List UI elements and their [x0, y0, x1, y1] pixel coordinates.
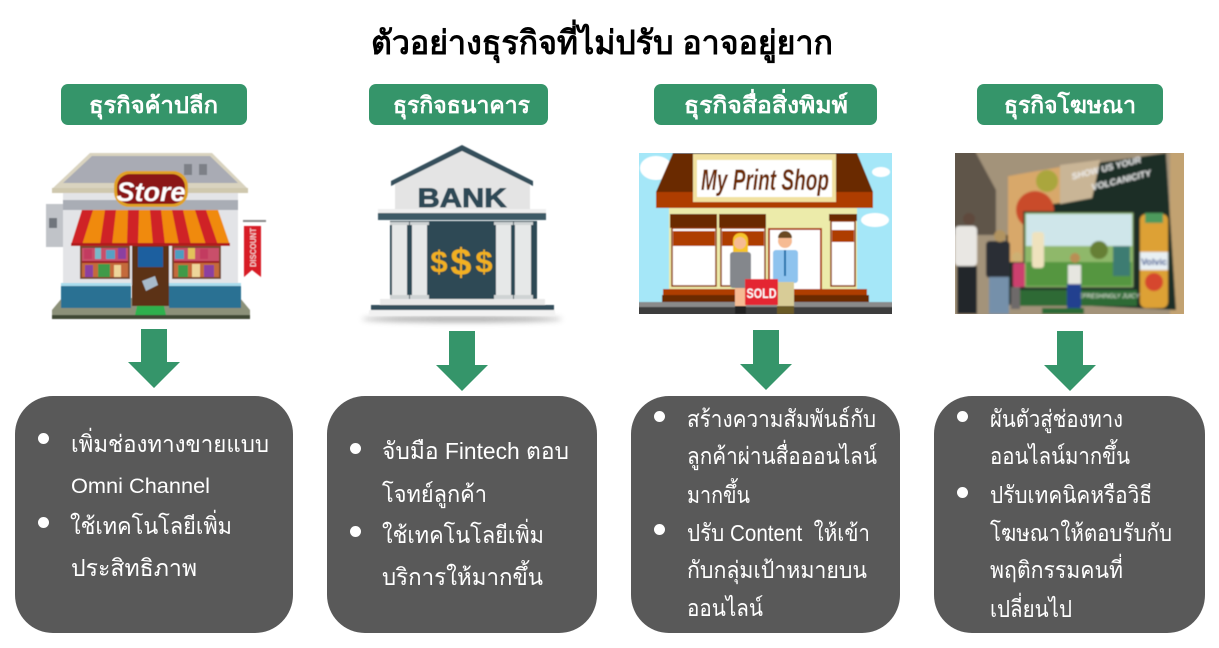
text block: ผันตัวสู่ช่องทาง	[990, 406, 1123, 434]
bullet	[654, 524, 665, 535]
text block: บริการให้มากขึ้น	[382, 560, 543, 590]
icon: bank illustration: $	[450, 242, 472, 284]
heading: print media	[654, 84, 877, 125]
text block: โฆษณาให้ตอบรับกับ	[990, 520, 1172, 546]
bullet	[654, 411, 665, 422]
heading: advertising	[977, 84, 1163, 125]
icon: print shop illustration	[639, 153, 892, 314]
icon: print shop illustration: My Print Shop	[701, 164, 829, 197]
text block: มากขึ้น	[687, 478, 750, 508]
icon: store illustration: Store	[116, 177, 186, 207]
text block: ลูกค้าผ่านสื่อออนไลน์	[687, 439, 877, 471]
text block: เพิ่มช่องทางขายแบบ	[71, 427, 269, 457]
text block: เปลี่ยนไป	[990, 592, 1072, 622]
text block: Omni Channel	[71, 475, 210, 498]
icon: advertising photo: VOLCANICITY	[1090, 168, 1153, 192]
text block: ปรับ Content ให้เข้า	[687, 520, 870, 546]
title: ตัวอย่างธุรกิจที่ไม่ปรับ อาจอยู่ยาก	[371, 19, 833, 64]
icon: store illustration: DISCOUNT	[249, 228, 258, 267]
icon: advertising photo	[955, 153, 1184, 314]
panel: retail actions	[15, 396, 293, 633]
panel: advertising actions	[934, 396, 1205, 633]
panel: print media actions	[631, 396, 900, 633]
heading: banking	[369, 84, 548, 125]
icon: advertising photo: SHOW US YOUR	[1070, 154, 1143, 182]
text block: จับมือ Fintech ตอบ	[382, 438, 569, 464]
text block: พฤติกรรมคนที่	[990, 553, 1123, 583]
icon: bank illustration: $	[475, 244, 493, 279]
bullet	[38, 517, 49, 528]
heading: advertising: ธุรกิจโฆษณา	[1004, 91, 1136, 120]
text block: ปรับเทคนิคหรือวิธี	[990, 482, 1152, 508]
icon: advertising photo: Volvic	[1141, 257, 1167, 267]
bullet	[38, 433, 49, 444]
panel: banking actions	[327, 396, 597, 633]
heading: banking: ธุรกิจธนาคาร	[393, 92, 531, 120]
heading: retail	[61, 84, 247, 125]
icon: print shop illustration: SOLD	[746, 285, 776, 301]
text block: ใช้เทคโนโลยีเพิ่ม	[382, 518, 544, 548]
bullet	[957, 487, 968, 498]
icon: bank illustration: BANK	[418, 183, 507, 213]
bullet	[350, 443, 361, 454]
heading: retail: ธุรกิจค้าปลีก	[89, 92, 218, 120]
text block: กับกลุ่มเป้าหมายบน	[687, 557, 867, 584]
text block	[382, 438, 569, 590]
bullet	[350, 526, 361, 537]
text block	[990, 406, 1172, 622]
text block: ประสิทธิภาพ	[71, 555, 197, 581]
icon: bank illustration: $	[430, 244, 448, 279]
icon: advertising photo: REFRESHINGLY JUICY	[1074, 294, 1141, 300]
text block: ออนไลน์มากขึ้น	[990, 439, 1130, 469]
text block: โจทย์ลูกค้า	[382, 481, 487, 509]
bullet	[957, 411, 968, 422]
text block: สร้างความสัมพันธ์กับ	[687, 406, 876, 432]
text block: ใช้เทคโนโลยีเพิ่ม	[70, 509, 232, 539]
text block	[687, 406, 877, 621]
heading: print media: ธุรกิจสื่อสิ่งพิมพ์	[684, 88, 848, 120]
text block: ออนไลน์	[687, 595, 763, 621]
text block	[70, 427, 269, 581]
